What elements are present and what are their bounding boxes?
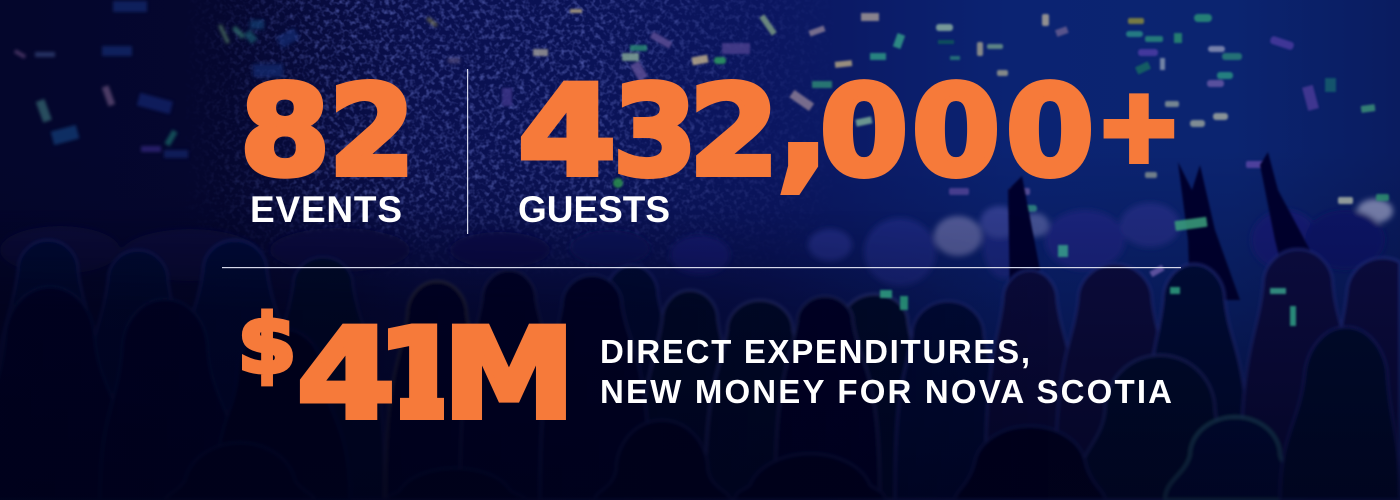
stat: 432,000+: + — [1097, 67, 1181, 184]
label: events: EVENTS — [250, 189, 402, 230]
stat: dollar sign: $ — [238, 298, 296, 391]
stat: 432,000+ — [518, 35, 1181, 207]
crowd: shade over lower area — [0, 189, 1400, 500]
stat: 432,000+: 3 — [613, 60, 697, 204]
crowd: head and shoulder silhouettes, back to front — [0, 240, 1400, 500]
description: direct expenditures: NEW MONEY FOR NOVA SCOTIA — [600, 373, 1172, 410]
confetti: dim left side — [14, 1, 460, 158]
description: direct expenditures: DIRECT EXPENDITURES, — [600, 333, 1030, 370]
stat: 41M — [300, 324, 566, 420]
crowd: dark raised arms — [1008, 152, 1310, 300]
stat: 41M: M — [443, 303, 575, 447]
stat: 82: 2 — [329, 60, 415, 204]
stat: 432,000+: , — [775, 35, 831, 207]
stat: 432,000+: 4 — [518, 60, 616, 204]
stat: 432,000+: 0 — [912, 60, 1000, 204]
label: guests: GUESTS — [518, 189, 670, 230]
divider: vertical — [467, 69, 468, 234]
stat: 432,000+: 2 — [689, 60, 779, 204]
confetti: centre and right — [502, 9, 1375, 212]
crowd: bright back row — [0, 199, 1393, 286]
stat: 432,000+: 0 — [1006, 60, 1094, 204]
stat: 82 — [240, 60, 415, 204]
confetti: near — [880, 194, 1389, 326]
description: direct expenditures — [600, 333, 1172, 410]
stat: 41M: 1 — [377, 303, 463, 447]
stat: 82: 8 — [240, 60, 330, 204]
stat: 432,000+: 0 — [820, 60, 908, 204]
divider: horizontal — [222, 267, 1181, 268]
stat: 41M: 4 — [297, 303, 395, 447]
